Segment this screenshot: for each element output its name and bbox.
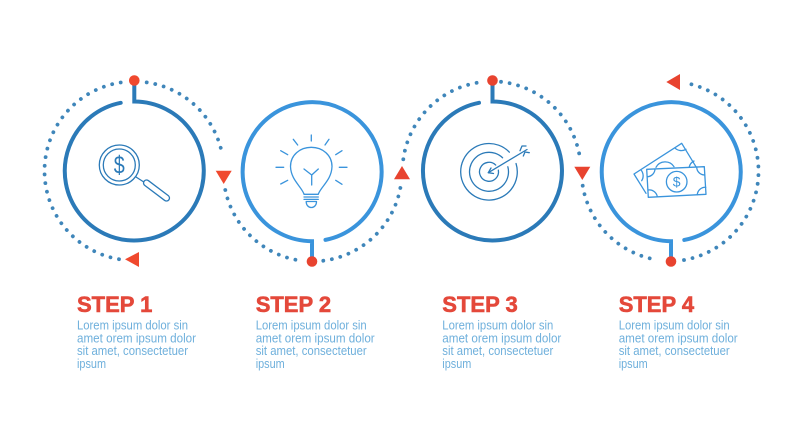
arrow: step 4 left <box>666 74 680 90</box>
body text: step 1: sit amet, consectetuer <box>77 344 188 358</box>
body text: step 4: ipsum <box>619 357 648 371</box>
icon: magnifier with dollar: $ <box>114 151 125 179</box>
heading: step 4: STEP 4 <box>619 292 695 317</box>
arrow: step 1 left <box>125 252 139 267</box>
step 2 circle group <box>225 102 410 267</box>
node: step 1 <box>129 75 140 86</box>
heading: step 2: STEP 2 <box>256 292 331 317</box>
node: step 3 <box>487 75 498 86</box>
ring: step 3 <box>423 81 562 240</box>
node: step 2 <box>307 256 317 267</box>
body text: step 1: amet orem ipsum dolor <box>77 331 196 345</box>
dotted path: step 3 <box>403 82 580 161</box>
body text: step 4: amet orem ipsum dolor <box>619 331 738 345</box>
step 4 text <box>619 292 738 371</box>
step 3 text <box>442 292 561 371</box>
heading: step 3: STEP 3 <box>442 292 518 317</box>
body text: step 1: Lorem ipsum dolor sin <box>77 318 188 332</box>
body text: step 2 <box>256 318 375 371</box>
ring: step 4 <box>602 102 741 261</box>
body text: step 1 <box>77 318 196 371</box>
body text: step 2: Lorem ipsum dolor sin <box>256 318 367 332</box>
body text: step 4 <box>619 318 738 371</box>
step 1 text <box>77 292 196 371</box>
dotted path: step 4 <box>583 83 759 260</box>
body text: step 3: sit amet, consectetuer <box>442 344 553 358</box>
ring: step 2 <box>243 102 382 261</box>
step 3 circle group <box>403 75 590 240</box>
body text: step 3: ipsum <box>442 357 471 371</box>
body text: step 2: sit amet, consectetuer <box>256 344 367 358</box>
step 4 circle group <box>583 74 759 267</box>
heading: step 1: STEP 1 <box>77 292 152 317</box>
node: step 4 <box>666 256 676 267</box>
ring: step 1 <box>65 81 204 241</box>
icon: banknotes: $ <box>673 174 681 190</box>
step 2 text <box>256 292 375 371</box>
icon: light bulb <box>276 135 347 208</box>
body text: step 4: Lorem ipsum dolor sin <box>619 318 730 332</box>
arrow: step 2 up <box>394 166 410 179</box>
dotted path: step 2 <box>225 186 401 261</box>
dotted path: step 1 <box>45 82 222 259</box>
body text: step 3: amet orem ipsum dolor <box>442 331 561 345</box>
icon: magnifier with dollar <box>99 145 171 202</box>
body text: step 4: sit amet, consectetuer <box>619 344 730 358</box>
body text: step 1: ipsum <box>77 357 106 371</box>
body text: step 3: Lorem ipsum dolor sin <box>442 318 553 332</box>
arrow: step 3 down <box>574 167 590 180</box>
step 1 circle group <box>45 75 232 267</box>
arrow: step 1 down <box>216 171 232 184</box>
body text: step 2: amet orem ipsum dolor <box>256 331 375 345</box>
icon: target with arrow <box>461 143 529 200</box>
body text: step 2: ipsum <box>256 357 285 371</box>
body text: step 3 <box>442 318 561 371</box>
icon: banknotes <box>634 143 706 197</box>
